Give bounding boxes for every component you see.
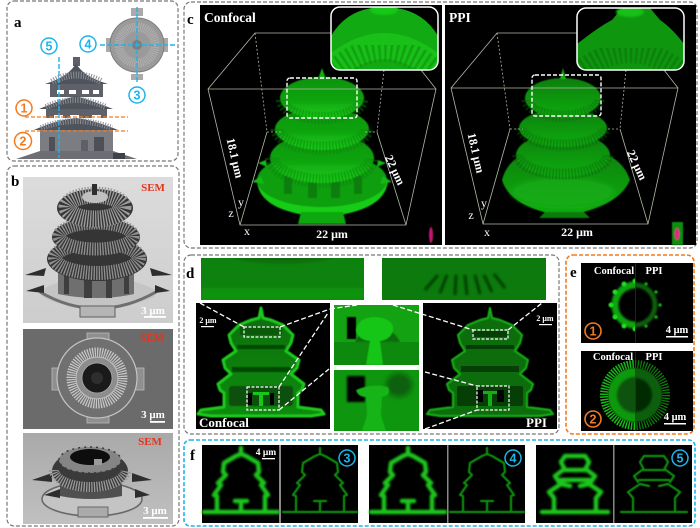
section lines blue: [59, 7, 176, 158]
ring 2 scale: 4 μm: [664, 412, 687, 423]
PPI PSF: [672, 222, 683, 245]
label b: b: [11, 174, 19, 190]
section lines orange: [25, 117, 128, 131]
section pair 4: [369, 445, 525, 523]
strip: confocal close-up: [201, 258, 364, 300]
ring image 2: [581, 351, 693, 431]
marker 3: [339, 450, 355, 466]
marker 4: [505, 450, 521, 466]
panel a: design model: [7, 1, 178, 161]
SEM image 1: [23, 177, 173, 323]
section pair 4: 4: [510, 452, 517, 466]
circled markers: 3: [134, 88, 141, 102]
PPI axis labels: x: [484, 225, 490, 239]
scale 1: 3 μm: [141, 305, 165, 317]
label d: d: [186, 266, 195, 282]
PPI axis labels: [465, 132, 650, 239]
icon: side view of model: [16, 57, 137, 159]
label c: c: [187, 12, 194, 28]
ring image 2: 2: [590, 412, 597, 426]
PPI axis labels: y: [481, 196, 487, 210]
PPI axis labels: 18.1 μm: [465, 132, 487, 174]
label f: f: [190, 448, 196, 464]
PPI pagoda: [502, 68, 630, 218]
circled markers: 2: [20, 134, 27, 148]
confocal wireframe: [208, 33, 436, 225]
confocal axis labels: y: [238, 195, 244, 209]
scale 2: 3 μm: [141, 409, 165, 421]
confocal 3D image: [200, 5, 442, 245]
confocal inset: [332, 8, 438, 70]
SEM tag 3: SEM: [138, 436, 163, 448]
ring image 1: 1: [590, 324, 597, 338]
icon: top view of model: [106, 8, 168, 80]
SEM image 3: [23, 433, 173, 524]
PPI section label: PPI: [526, 415, 547, 430]
confocal pagoda: [252, 68, 392, 224]
label e: e: [570, 265, 577, 281]
marker 5: [672, 450, 688, 466]
PPI half disc: [636, 360, 670, 430]
zoom connector lines: [200, 303, 542, 429]
PPI title: PPI: [449, 10, 471, 25]
PPI zoom box: [532, 75, 601, 116]
PPI axis labels: 22 μm: [624, 148, 650, 182]
section pair 5: [536, 445, 692, 523]
PPI section image: [423, 303, 557, 430]
panel f: axial sections: [184, 440, 695, 526]
confocal section label: Confocal: [199, 415, 249, 430]
circled markers: 1: [21, 102, 28, 116]
confocal axis labels: z: [228, 206, 234, 220]
PPI 3D image: [445, 5, 696, 245]
ring 2 titles: PPI: [646, 352, 662, 363]
circled markers: [14, 36, 145, 150]
confocal section image: [196, 303, 330, 430]
ring image 1: [581, 263, 693, 343]
confocal axis labels: 18.1 μm: [224, 137, 246, 179]
confocal zoom box: [287, 78, 357, 118]
marker 2: [585, 411, 601, 427]
SEM tag 1: SEM: [141, 182, 166, 194]
ring 2 titles: Confocal: [593, 352, 633, 363]
ring 1 titles: PPI: [646, 266, 662, 277]
circled markers: 5: [46, 40, 53, 54]
marker 1: [585, 323, 601, 339]
PPI zoom boxes: [473, 330, 509, 410]
scale 3: 3 μm: [143, 505, 167, 517]
strip: PPI close-up: [382, 258, 546, 300]
confocal axis labels: x: [244, 224, 250, 238]
confocal title: Confocal: [204, 10, 256, 25]
ring 2 titles: [593, 352, 662, 363]
ring 1 titles: [594, 266, 662, 277]
panel d: cross sections: [184, 246, 559, 434]
circled markers: 4: [85, 38, 92, 52]
confocal zoom boxes: [244, 327, 280, 410]
confocal axis labels: 22 μm: [316, 227, 348, 241]
SEM image 2: [23, 329, 173, 429]
PPI section scale: 2 μm: [536, 314, 554, 323]
label a: a: [14, 15, 22, 31]
ring 1 scale: 4 μm: [666, 325, 689, 336]
confocal half ring: [608, 278, 635, 332]
SEM tag 2: SEM: [140, 332, 165, 344]
confocal PSF: [429, 227, 433, 243]
PPI axis labels: z: [468, 208, 474, 222]
ring 1 titles: Confocal: [594, 266, 634, 277]
PPI wireframe: [451, 33, 678, 224]
panel b: SEM images: [7, 166, 179, 526]
close-up: confocal column: [334, 305, 419, 365]
confocal half disc: [600, 360, 635, 430]
confocal section scale: 2 μm: [199, 316, 217, 325]
PPI inset: [577, 7, 684, 72]
section pair 3: [202, 445, 358, 523]
panel c: 3D volume renders: [184, 2, 697, 248]
section pair 3: 3: [344, 452, 351, 466]
PPI section silhouette: [427, 308, 553, 416]
confocal section silhouette: [198, 308, 324, 416]
panel e: transverse sections: [566, 255, 694, 434]
confocal axis labels: [224, 137, 408, 241]
scale f: 4 μm: [256, 448, 276, 458]
close-up: PPI column: [334, 370, 419, 431]
PPI axis labels: 22 μm: [561, 225, 593, 239]
section pair 5: 5: [677, 452, 684, 466]
PPI half ring: [636, 281, 662, 329]
confocal axis labels: 22 μm: [382, 153, 408, 187]
